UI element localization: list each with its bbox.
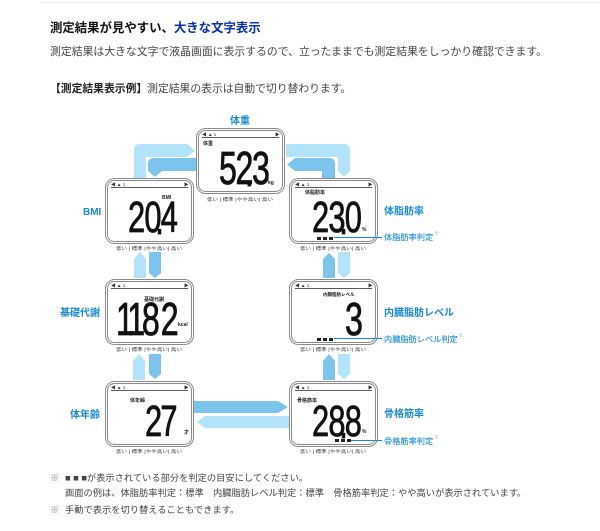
scale: body fat: 低い | 標準 |やや高い| 高い: [300, 245, 366, 252]
label: visceral small: 内臓脂肪レベル: [323, 291, 355, 298]
footnote 2: ※: [50, 505, 59, 515]
label: basal metabolism: 基礎代謝: [60, 306, 100, 319]
display: visceral fat: [290, 280, 378, 353]
label: body fat small: 体脂肪率: [305, 189, 325, 196]
display: BMI: ▶: [184, 182, 189, 187]
value: skeletal: 28.8: [312, 398, 362, 448]
scale: BMI: 低い | 標準 |やや高い| 高い: [116, 245, 182, 252]
callout: skeletal judgement: [351, 435, 439, 446]
label: body fat: 体脂肪率: [384, 204, 424, 218]
label: BMI: BMI: [83, 207, 102, 218]
display: weight: ◀ ▲ 1: [202, 132, 217, 137]
unit: percent: %: [362, 429, 367, 435]
callout: skeletal judgement: ※: [434, 435, 439, 441]
callout: visceral judgement: 内臓脂肪レベル判定: [384, 334, 458, 344]
judgement marks: visceral: [317, 338, 333, 341]
display: skeletal muscle: ▶: [368, 385, 373, 390]
label: basal small: 基礎代謝: [144, 296, 164, 303]
title: 測定結果が見やすい、大きな文字表示: [50, 21, 261, 35]
scale: age: 低い | 標準 |やや高い| 高い: [116, 448, 182, 455]
display: body fat: [290, 178, 378, 252]
display: basal metabolism: ◀ ▲ 1: [111, 283, 126, 288]
value: BMI: 20.4: [128, 194, 178, 244]
display: body age: ◀ ▲ 1: [111, 385, 126, 390]
display: weight: ▶: [275, 132, 280, 137]
judgement marks: skeletal: [335, 439, 351, 442]
scale: visceral: 低い | 標準 |やや高い| 高い: [300, 346, 366, 353]
label: BMI small: BMI: [162, 195, 172, 201]
callout: body fat judgement: ※: [434, 231, 439, 237]
label: skeletal muscle: 骨格筋率: [384, 407, 424, 420]
footnote 1 continued: 画面の例は、体脂肪率判定：標準 内臓脂肪レベル判定：標準 骨格筋率判定：やや高いが表示されています。: [65, 488, 526, 498]
display: body fat: ◀ ▲ 1: [295, 182, 310, 187]
callout: skeletal judgement: 骨格筋率判定: [384, 436, 433, 446]
callout: body fat judgement: [334, 231, 439, 242]
display: basal metabolism: [106, 280, 194, 353]
callout: body fat judgement: 体脂肪率判定: [384, 232, 433, 242]
value: basal: 1182: [116, 294, 179, 345]
display: visceral fat: ◀ ▲ 1: [295, 283, 310, 288]
scale: weight: 低い | 標準 |やや高い| 高い: [207, 196, 273, 203]
unit: kg: kg: [268, 180, 274, 186]
arrows: display cycle: [133, 144, 350, 428]
label: skeletal small: 骨格筋率: [297, 397, 317, 404]
label: weight: 体重: [230, 114, 250, 127]
label: visceral fat: 内臓脂肪レベル: [384, 306, 454, 319]
display: visceral fat: ▶: [368, 283, 373, 288]
value: visceral: 3: [345, 294, 363, 345]
footnote 1: ※: [50, 473, 59, 483]
scale: basal: 低い | 標準 |やや高い| 高い: [116, 346, 182, 353]
judgement marks: body fat: [317, 237, 333, 240]
value: body fat: 23.0: [312, 194, 362, 244]
intro text: 測定結果は大きな文字で液晶画面に表示するので、立ったままでも測定結果をしっかり確認できます。: [50, 46, 547, 58]
display: body fat: ▶: [368, 182, 373, 187]
footnote 2: 手動で表示を切り替えることもできます。: [65, 505, 239, 515]
display: body age: ▶: [184, 385, 189, 390]
label: body age: 体年齢: [70, 408, 100, 421]
display: BMI: ◀ ▲ 1: [111, 182, 126, 187]
scale: skeletal: 低い | 標準 |やや高い| 高い: [300, 448, 366, 455]
unit: age: 才: [184, 429, 189, 436]
value: age: 27: [145, 398, 178, 446]
unit: percent: %: [362, 227, 367, 233]
display: skeletal muscle: [290, 382, 378, 455]
display: body age: [106, 382, 194, 455]
example heading: 【測定結果表示例】測定結果の表示は自動で切り替わります。: [50, 83, 351, 95]
label: weight small: 体重: [203, 140, 213, 147]
display: skeletal muscle: ◀ ▲ 1: [295, 385, 310, 390]
callout: visceral judgement: [334, 333, 463, 344]
footnote 1: ■ ■ ■が表示されている部分を判定の目安にしてください。: [65, 473, 308, 483]
display: basal metabolism: ▶: [184, 283, 189, 288]
label: age small: 体年齢: [130, 397, 145, 404]
unit: kcal: kcal: [178, 322, 188, 328]
display: BMI: [106, 178, 194, 252]
display: weight: [196, 128, 284, 203]
value: weight: 52.3: [219, 143, 270, 196]
callout: visceral judgement: ※: [458, 333, 463, 339]
